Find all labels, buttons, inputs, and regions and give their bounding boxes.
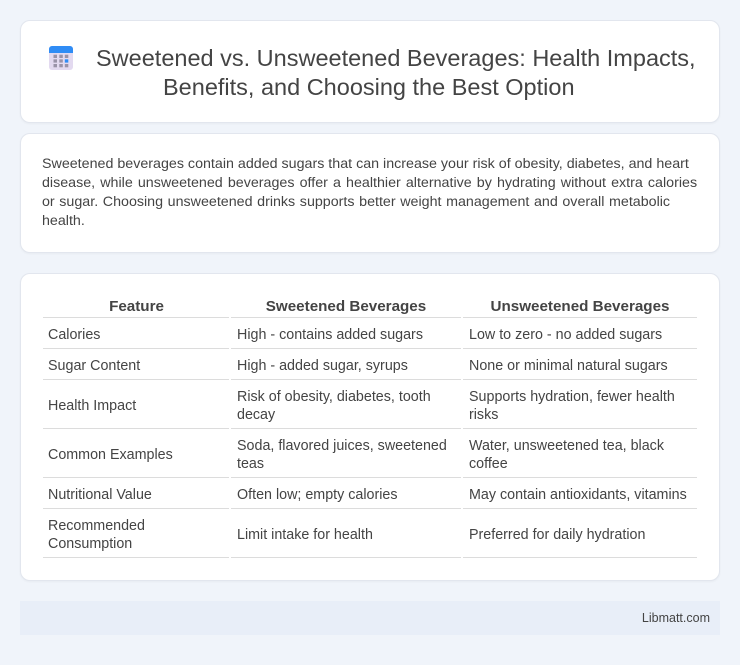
intro panel: [20, 133, 720, 253]
title: [96, 45, 696, 100]
row: common examples: Soda, flavored juices, sweetened: [237, 438, 447, 454]
row: nutritional value: Nutritional Value: [48, 487, 152, 503]
row: health impact: risks: [469, 407, 498, 423]
row: recommended consumption: Preferred for daily hydration: [469, 527, 645, 543]
header card: [20, 20, 720, 123]
table headers: Feature: [109, 298, 164, 315]
row: health impact: Risk of obesity, diabetes, tooth: [237, 389, 431, 405]
title: Benefits, and Choosing the Best Option: [163, 74, 575, 100]
footer bar: [20, 601, 720, 635]
row: sugar content: [48, 358, 668, 374]
row: calories: [48, 327, 662, 343]
intro text: Sweetened beverages contain added sugars that can increase your risk of obesity, diabetes, and heart: [42, 156, 689, 172]
row: nutritional value: May contain antioxidants, vitamins: [469, 487, 687, 503]
table headers: Unsweetened Beverages: [491, 298, 669, 315]
row: common examples: Water, unsweetened tea, black: [469, 438, 664, 454]
row: sugar content: Sugar Content: [48, 358, 140, 374]
row: common examples: [48, 438, 664, 472]
row: calories: Low to zero - no added sugars: [469, 327, 662, 343]
row: recommended consumption: Recommended: [48, 518, 145, 534]
row: health impact: Supports hydration, fewer health: [469, 389, 675, 405]
row: calories: Calories: [48, 327, 100, 343]
row: health impact: [48, 389, 675, 423]
row: recommended consumption: [48, 518, 645, 552]
footer text: Libmatt.com: [642, 611, 710, 625]
intro text: health.: [42, 213, 85, 229]
comparison table panel: [20, 273, 720, 581]
row: common examples: Common Examples: [48, 447, 173, 463]
row: recommended consumption: Limit intake for health: [237, 527, 373, 543]
row: calories: High - contains added sugars: [237, 327, 423, 343]
row: health impact: Health Impact: [48, 398, 136, 414]
intro text: disease, while unsweetened beverages offer a healthier alternative by hydrating without extra calories: [42, 175, 697, 191]
intro text: or sugar. Choosing unsweetened drinks supports better weight management and overall metabolic: [42, 194, 670, 210]
icon: calendar: [49, 46, 73, 70]
row: recommended consumption: Consumption: [48, 536, 132, 552]
table headers: [109, 298, 669, 315]
row: health impact: decay: [237, 407, 275, 423]
row: sugar content: High - added sugar, syrups: [237, 358, 408, 374]
row: nutritional value: Often low; empty calories: [237, 487, 398, 503]
table headers: Sweetened Beverages: [266, 298, 426, 315]
title: Sweetened vs. Unsweetened Beverages: Health Impacts,: [96, 45, 696, 71]
row: sugar content: None or minimal natural sugars: [469, 358, 668, 374]
intro text: [42, 156, 697, 229]
row: common examples: teas: [237, 456, 264, 472]
row: nutritional value: [48, 487, 687, 503]
row: common examples: coffee: [469, 456, 508, 472]
